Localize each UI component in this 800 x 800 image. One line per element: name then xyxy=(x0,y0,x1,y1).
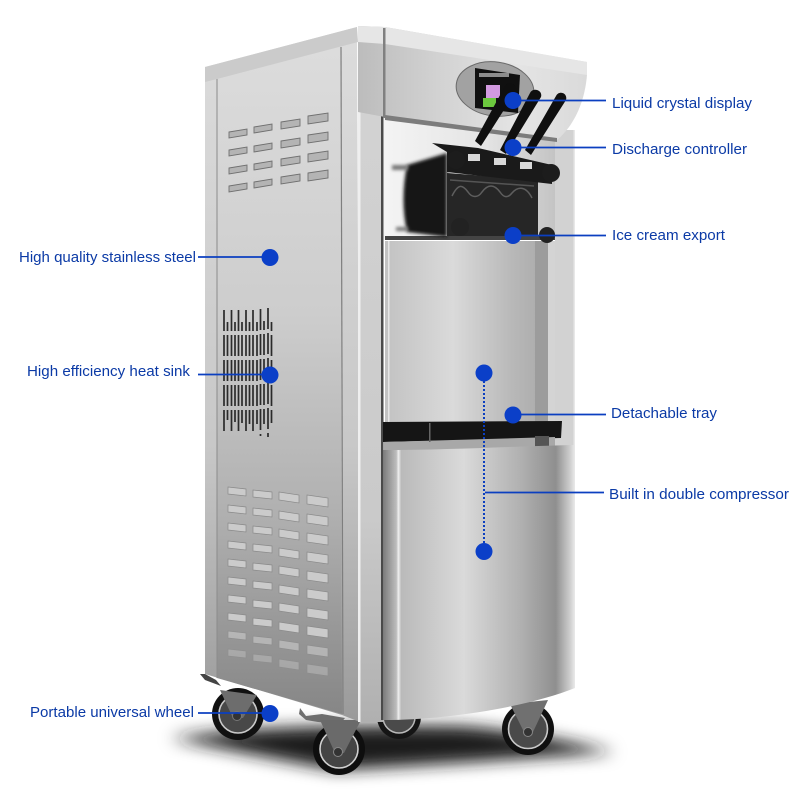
head top xyxy=(358,26,587,142)
drip tray xyxy=(383,421,562,452)
callout: portable universal wheel xyxy=(30,704,278,722)
callout: high quality stainless steel: High quality stainless steel xyxy=(19,249,196,266)
dispenser recess xyxy=(384,115,555,240)
callout: ice cream export xyxy=(504,227,726,244)
three dispensing handles xyxy=(475,83,566,155)
lower door xyxy=(383,445,575,720)
lower air vents xyxy=(228,487,328,676)
callout: discharge controller xyxy=(504,139,747,158)
heat sink slots xyxy=(224,308,272,437)
floor shadow xyxy=(170,726,615,770)
callout: portable universal wheel: Portable universal wheel xyxy=(30,704,194,721)
callout: ice cream export: Ice cream export xyxy=(612,227,726,244)
callout: high quality stainless steel xyxy=(19,249,278,266)
callout: high efficiency heat sink: High efficiency heat sink xyxy=(27,363,190,380)
callout: built in double compressor: Built in double compressor xyxy=(609,486,789,503)
wheel: back centre xyxy=(377,695,421,739)
right column xyxy=(555,130,575,450)
display panel xyxy=(453,57,537,121)
machine side panel xyxy=(200,27,360,722)
wheel: front left xyxy=(212,688,264,740)
callout: liquid crystal display xyxy=(504,92,752,112)
dispenser mechanism xyxy=(392,143,560,243)
callout: discharge controller: Discharge controller xyxy=(612,141,747,158)
wheel: right xyxy=(502,700,554,755)
middle front panel xyxy=(385,236,555,423)
callout: liquid crystal display: Liquid crystal display xyxy=(612,95,752,112)
upper air vents xyxy=(229,113,328,192)
callout: detachable tray: Detachable tray xyxy=(611,405,718,422)
callout: built in double compressor xyxy=(476,364,789,560)
callout: detachable tray xyxy=(504,405,718,424)
callout: high efficiency heat sink xyxy=(27,363,278,384)
wheel: front centre with brake xyxy=(299,708,365,775)
machine corner post xyxy=(358,40,384,722)
